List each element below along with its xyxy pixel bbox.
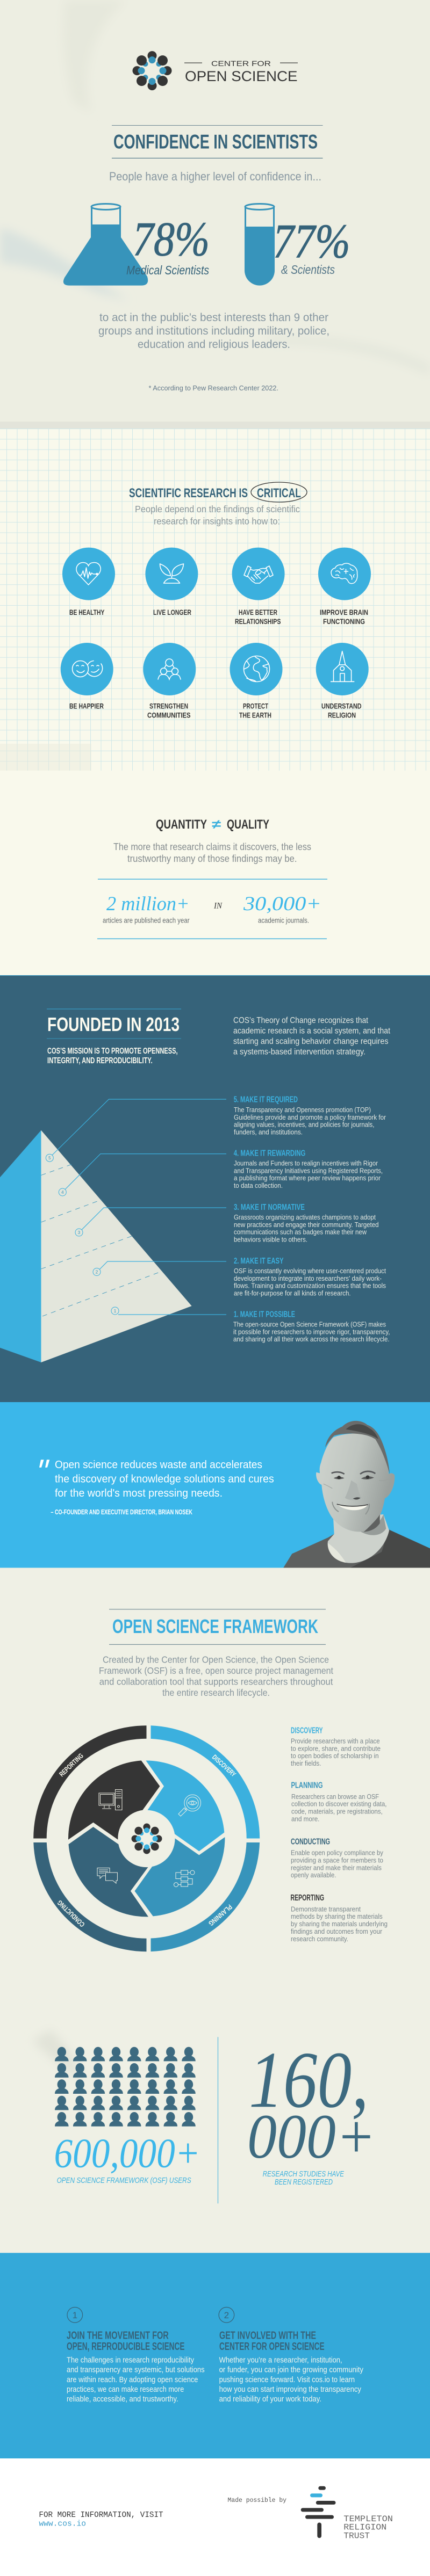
step 2: make it easy: OSF is constantly evolving where user-centered product xyxy=(234,1267,386,1275)
stat: 2 million articles xyxy=(103,893,190,925)
step 4: make it rewarding: and Transparency Initiatives using Registered Reports, xyxy=(234,1167,383,1174)
column 1: join the movement xyxy=(67,2307,205,2404)
stat: 600,000+ users: 600,000+ xyxy=(54,2130,200,2176)
title: founded in 2013: FOUNDED IN 2013 xyxy=(47,1013,180,1035)
stat: 160,000+ studies: BEEN REGISTERED xyxy=(275,2178,333,2187)
wheel section: planning with flowchart icon xyxy=(134,1837,225,1916)
stat: 600,000+ users: OPEN SCIENCE FRAMEWORK (OSF) USERS xyxy=(57,2176,191,2185)
text block: planning: code, materials, pre registrations, xyxy=(291,1808,383,1815)
paragraph: public interest xyxy=(98,311,329,351)
column 2: get involved: and reliability of your work today. xyxy=(219,2395,321,2404)
icon: test tube xyxy=(245,204,275,286)
intro paragraph: and collaboration tool that supports researchers throughout xyxy=(99,1676,333,1687)
panel: scientific research is critical xyxy=(0,429,430,771)
logo mark xyxy=(132,51,172,90)
step 1: make it possible: The open-source Open Science Framework (OSF) makes xyxy=(233,1321,386,1329)
label: made possible by: Made possible by xyxy=(228,2497,286,2504)
icon: two smiling faces xyxy=(72,661,103,677)
link: more information: www.cos.io xyxy=(39,2519,86,2528)
step 2: make it easy: flows. Training and customization ensures that the tools xyxy=(234,1282,386,1290)
heading: scientific research is critical xyxy=(129,482,307,502)
link: more information xyxy=(39,2510,163,2528)
item: understand religion xyxy=(316,643,369,720)
step 2: make it easy: 2. MAKE IT EASY xyxy=(234,1257,284,1266)
stat: 2 million articles: articles are published each year xyxy=(103,916,190,925)
link: more information: FOR MORE INFORMATION, VISIT xyxy=(39,2510,163,2520)
column 2: get involved: 2 xyxy=(224,2310,229,2320)
column 2: get involved: Whether you’re a researcher, institution, xyxy=(219,2356,342,2364)
heading: quantity not equal quality: QUALITY xyxy=(227,817,269,832)
intro text: trustworthy many of those findings may be. xyxy=(127,853,297,864)
item: have better relationships: HAVE BETTER xyxy=(239,608,277,616)
item: strengthen communities: STRENGTHEN xyxy=(149,701,188,710)
stat: 160,000+ studies: 000+ xyxy=(247,2101,376,2172)
stat: 30000 journals xyxy=(243,893,321,925)
step 3: make it normative: communications such as badges make their new xyxy=(234,1229,367,1236)
column 2: get involved xyxy=(219,2307,364,2404)
intro text: research for insights into how to: xyxy=(154,516,280,526)
text block: discovery: their fields. xyxy=(291,1760,321,1767)
lifecycle wheel diagram xyxy=(33,1725,260,1951)
stat: 77 percent: 77% xyxy=(273,215,350,269)
quote attribution: – CO-FOUNDER AND EXECUTIVE DIRECTOR, BRIAN NOSEK xyxy=(51,1508,192,1516)
item: strengthen communities xyxy=(143,643,196,720)
text block: conducting: Enable open policy compliance by xyxy=(291,1849,384,1857)
column 2: get involved: pushing science forward. Visit cos.io to learn xyxy=(219,2376,355,2384)
item: be happier: BE HAPPIER xyxy=(69,701,104,710)
column 1: join the movement: OPEN, REPRODUCIBLE SCIENCE xyxy=(67,2341,184,2353)
quote text xyxy=(55,1458,274,1499)
item: understand religion: UNDERSTAND xyxy=(321,701,361,710)
panel: confidence in scientists xyxy=(0,0,430,429)
item: strengthen communities: COMMUNITIES xyxy=(147,711,191,720)
logo: center for open science xyxy=(132,51,298,90)
text block: planning: and more. xyxy=(291,1815,319,1823)
item: be happier xyxy=(61,643,113,710)
item: improve brain functioning xyxy=(318,548,371,626)
stat: 160,000+ studies: 160, xyxy=(249,2035,369,2124)
text block: discovery: to explore, share, and contribute xyxy=(291,1745,381,1752)
stat: 2 million articles: 2 million+ xyxy=(106,893,189,915)
stat: 30000 journals: academic journals. xyxy=(258,916,309,925)
pyramid diagram: 2 xyxy=(96,1269,98,1275)
ring segment: conducting: CONDUCTING xyxy=(55,1899,87,1928)
stat: 160,000+ studies xyxy=(247,2035,376,2187)
icon: quotation mark xyxy=(39,1460,49,1468)
icon: heart xyxy=(76,563,101,585)
text block: reporting: findings and outcomes from your xyxy=(291,1928,382,1935)
ring segment: planning xyxy=(150,1842,260,1951)
intro paragraph: the entire research lifecycle. xyxy=(162,1687,270,1698)
column 1: join the movement: 1 xyxy=(73,2310,77,2320)
logo: templeton religion trust: TEMPLETON xyxy=(343,2514,393,2524)
column 1: join the movement: and transparency are systemic, but solutions xyxy=(67,2366,205,2375)
mission statement: INTEGRITY, AND REPRODUCIBILITY. xyxy=(47,1056,153,1065)
label: in: IN xyxy=(213,901,223,911)
item: have better relationships: RELATIONSHIPS xyxy=(235,617,281,626)
step 5: make it required: 5. MAKE IT REQUIRED xyxy=(234,1095,298,1105)
step markers xyxy=(46,1154,119,1315)
ring segment: discovery xyxy=(150,1725,260,1839)
stat: 160,000+ studies: RESEARCH STUDIES HAVE xyxy=(263,2170,344,2179)
text block: planning: collection to discover existing data, xyxy=(291,1801,386,1808)
ring segment: reporting: REPORTING xyxy=(58,1752,85,1778)
stat: 78 percent: 78% xyxy=(133,213,210,266)
item: improve brain functioning: IMPROVE BRAIN xyxy=(320,608,368,616)
text block: reporting: research community. xyxy=(291,1935,348,1943)
text block: reporting xyxy=(290,1893,388,1943)
intro text xyxy=(113,841,311,864)
step 5: make it required: The Transparency and Openness promotion (TOP) xyxy=(234,1106,371,1114)
step 3: make it normative: 3. MAKE IT NORMATIVE xyxy=(234,1203,305,1212)
wheel section: discovery with magnifier icon xyxy=(146,1760,224,1851)
logo: templeton religion trust: TRUST xyxy=(343,2531,370,2541)
step 4: make it rewarding: Journals and Funders to realign incentives with Rigor xyxy=(234,1160,378,1167)
title: open science framework: OPEN SCIENCE FRAMEWORK xyxy=(112,1615,318,1637)
theory of change paragraph: starting and scaling behavior change requires xyxy=(233,1037,389,1046)
theory of change paragraph: a systems-based intervention strategy. xyxy=(233,1047,366,1057)
column 1: join the movement: are within reach. By adopting open science xyxy=(67,2376,198,2384)
logo: templeton religion trust: RELIGION xyxy=(343,2523,386,2533)
column 1: join the movement: reliable, accessible, and trustworthy. xyxy=(67,2395,178,2404)
column 2: get involved: CENTER FOR OPEN SCIENCE xyxy=(219,2341,325,2353)
text block: conducting: CONDUCTING xyxy=(291,1837,330,1846)
footnote: * According to Pew Research Center 2022. xyxy=(148,384,278,392)
heading: quantity not equal quality: ≠ xyxy=(212,817,221,832)
title: confidence in scientists: CONFIDENCE IN SCIENTISTS xyxy=(113,131,318,153)
column 1: join the movement: JOIN THE MOVEMENT FOR xyxy=(67,2330,169,2342)
heading: scientific research is critical: SCIENTIFIC RESEARCH IS xyxy=(129,486,248,500)
logo: center for open science: CENTER FOR xyxy=(211,59,271,68)
ring segment: discovery: DISCOVERY xyxy=(211,1753,238,1779)
item: be healthy: BE HEALTHY xyxy=(69,608,105,616)
stat: 30000 journals: 30,000+ xyxy=(243,893,321,915)
item: be healthy xyxy=(62,548,115,616)
step 5: make it required xyxy=(234,1095,386,1136)
panel: founded in 2013 xyxy=(0,975,430,1402)
quote text: the discovery of knowledge solutions and cures xyxy=(55,1473,274,1485)
icon: plant xyxy=(160,564,184,583)
text block: conducting: providing a space for members to xyxy=(291,1856,383,1864)
panel: quote xyxy=(0,1402,430,1568)
text block: discovery: Provide researchers with a place xyxy=(291,1737,380,1745)
intro paragraph: Created by the Center for Open Science, the Open Science xyxy=(103,1655,329,1665)
logo mark: wheel centre xyxy=(132,1824,162,1854)
text block: reporting: REPORTING xyxy=(290,1893,324,1903)
paragraph: public interest: to act in the public’s best interests than 9 other xyxy=(99,311,328,324)
step 4: make it rewarding: a publishing format where peer review happens prior xyxy=(234,1174,381,1182)
item: protect the earth: PROTECT xyxy=(243,701,268,710)
item: live longer: LIVE LONGER xyxy=(153,608,191,616)
pyramid diagram xyxy=(0,1099,226,1362)
text block: planning: PLANNING xyxy=(291,1781,322,1790)
label: and scientists: & Scientists xyxy=(281,263,335,277)
paragraph: public interest: groups and institutions including military, police, xyxy=(98,325,329,337)
step 3: make it normative: behaviors visible to others. xyxy=(234,1236,307,1243)
column 2: get involved: GET INVOLVED WITH THE xyxy=(219,2330,316,2342)
step 2: make it easy xyxy=(234,1257,386,1297)
icon: handshake xyxy=(244,566,273,583)
step 4: make it rewarding xyxy=(234,1149,383,1189)
text block: conducting: openly available. xyxy=(291,1871,336,1879)
quote text: Open science reduces waste and accelerates xyxy=(55,1458,262,1471)
icon: brain xyxy=(331,563,357,584)
step 2: make it easy: development to integrate into researchers' daily work- xyxy=(234,1275,382,1282)
ring segment: conducting xyxy=(33,1842,146,1951)
panel: call to action xyxy=(0,2253,430,2458)
theory of change paragraph: COS’s Theory of Change recognizes that xyxy=(233,1016,369,1025)
item: improve brain functioning: FUNCTIONING xyxy=(323,617,365,626)
text block: reporting: methods by sharing the materials xyxy=(291,1913,383,1920)
logo: templeton religion trust xyxy=(301,2486,393,2541)
portrait: brian nosek xyxy=(283,1421,430,1568)
logo: center for open science: OPEN SCIENCE xyxy=(185,68,298,84)
ring segment: reporting xyxy=(33,1725,147,1839)
intro text: The more that research claims it discovers, the less xyxy=(113,841,311,852)
text block: conducting: register and make their materials xyxy=(291,1864,382,1871)
icon: church xyxy=(331,651,354,681)
theory of change paragraph: academic research is a social system, and that xyxy=(233,1027,391,1035)
step 1: make it possible: it possible for researchers to improve rigor, transparency, xyxy=(233,1328,390,1336)
column 2: get involved: or funder, you can join the growing community xyxy=(219,2366,364,2375)
item: have better relationships xyxy=(232,548,285,626)
step 4: make it rewarding: to data collection. xyxy=(234,1182,283,1189)
ring segment: planning: PLANNING xyxy=(207,1903,234,1928)
icon array: people xyxy=(55,2047,196,2127)
column 2: get involved: how you can start improving the transparency xyxy=(219,2385,362,2394)
step 2: make it easy: are fit-for-purpose for all kinds of research. xyxy=(234,1289,351,1297)
text block: conducting xyxy=(291,1837,384,1879)
text block: planning: Researchers can browse an OSF xyxy=(291,1793,379,1801)
text block: discovery: DISCOVERY xyxy=(291,1726,323,1736)
step 4: make it rewarding: 4. MAKE IT REWARDING xyxy=(234,1149,305,1158)
icon: flask xyxy=(63,204,148,286)
text block: reporting: by sharing the materials underlying xyxy=(291,1920,388,1928)
intro paragraph xyxy=(99,1655,333,1698)
wheel section: reporting with computer icon xyxy=(68,1760,160,1840)
text block: discovery xyxy=(291,1726,381,1767)
step 3: make it normative xyxy=(234,1203,379,1243)
pyramid diagram: 1 xyxy=(114,1309,117,1314)
pyramid diagram: 5 xyxy=(48,1156,51,1160)
item: protect the earth xyxy=(230,643,283,720)
quote text: for the world's most pressing needs. xyxy=(55,1487,223,1499)
step 1: make it possible: and sharing of all their work across the research lifecycle. xyxy=(233,1336,389,1343)
text block: planning xyxy=(291,1781,386,1823)
step 5: make it required: funders, and institutions. xyxy=(234,1128,303,1136)
panel: footer xyxy=(0,2458,430,2576)
column 1: join the movement: practices, we can make research more xyxy=(67,2385,184,2394)
mission statement xyxy=(47,1047,178,1065)
step 3: make it normative: Grassroots organizing activates champions to adopt xyxy=(234,1214,376,1221)
pyramid diagram: 3 xyxy=(78,1230,81,1235)
column 1: join the movement: The challenges in research reproducibility xyxy=(67,2356,195,2364)
pyramid diagram: 4 xyxy=(61,1190,64,1195)
intro text xyxy=(135,504,300,526)
panel: open science framework xyxy=(0,1568,430,2253)
intro paragraph: Framework (OSF) is a free, open source project management xyxy=(99,1665,333,1676)
item: protect the earth: THE EARTH xyxy=(239,711,271,720)
paragraph: public interest: education and religious leaders. xyxy=(138,338,290,351)
intro line: People have a higher level of confidence in... xyxy=(109,170,321,183)
step 1: make it possible: 1. MAKE IT POSSIBLE xyxy=(234,1310,295,1319)
mission statement: COS’S MISSION IS TO PROMOTE OPENNESS, xyxy=(47,1047,178,1056)
icon: globe xyxy=(244,656,270,682)
step 5: make it required: Guidelines provide and promote a policy framework for xyxy=(234,1114,386,1121)
heading: quantity not equal quality xyxy=(156,817,269,832)
item: understand religion: RELIGION xyxy=(328,711,356,720)
panel: quantity is not quality xyxy=(0,771,430,975)
step 1: make it possible xyxy=(233,1310,390,1343)
wheel section: conducting with chat icon xyxy=(69,1827,148,1917)
label: medical scientists: Medical Scientists xyxy=(126,263,209,277)
item: live longer xyxy=(145,548,198,616)
icon: community of people xyxy=(158,659,181,679)
step 3: make it normative: new practices and engage their community. Targeted xyxy=(234,1221,379,1229)
theory of change paragraph xyxy=(233,1016,391,1057)
intro text: People depend on the findings of scientific xyxy=(135,504,300,514)
heading: quantity not equal quality: QUANTITY xyxy=(156,817,207,832)
text block: reporting: Demonstrate transparent xyxy=(291,1905,361,1913)
heading: scientific research is critical: CRITICAL xyxy=(257,486,301,500)
step 5: make it required: aligning values, incentives, and policies for journals, xyxy=(234,1121,374,1129)
text block: discovery: to open bodies of scholarship in xyxy=(291,1752,379,1760)
